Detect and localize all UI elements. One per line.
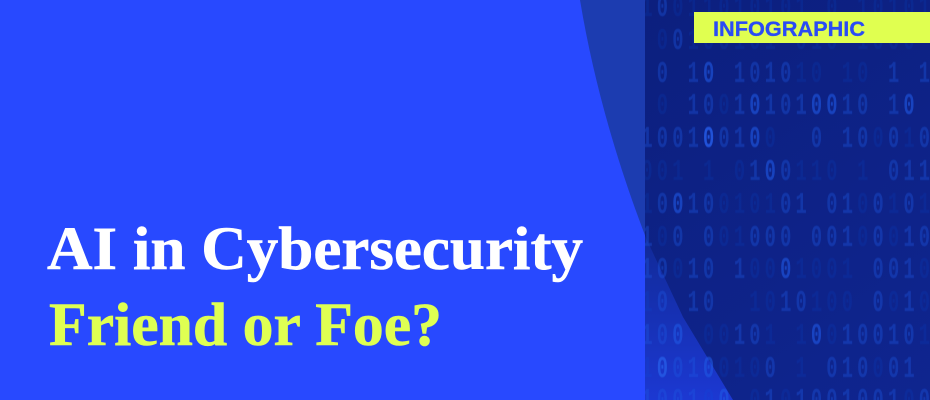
tag: infographic label: INFOGRAPHIC xyxy=(713,18,865,41)
title xyxy=(47,216,583,359)
panel: binary code background: 100 00101 100100101 xyxy=(641,319,930,354)
panel: binary code background: 10010010101 0100101 xyxy=(641,188,930,223)
panel: binary code background: 100100100 0 100010 xyxy=(641,122,930,157)
panel: binary code background: 100 001000 00100010 xyxy=(641,221,930,256)
panel: binary code background: 10010 10001001 0010 xyxy=(641,253,930,288)
panel: binary code background xyxy=(641,0,930,400)
panel: binary code background: 100100100 1 010001 xyxy=(641,352,919,387)
panel: binary code background: 0 100101010010 10 xyxy=(641,89,919,124)
title line 2: Friend or Foe? xyxy=(49,292,442,359)
title line 1: AI in Cybersecurity xyxy=(47,216,583,283)
curved strip xyxy=(580,0,646,238)
panel: binary code background: 001 1 0100110 1 011 xyxy=(641,155,930,190)
panel: binary code background: 0 10 101010 10 1 1 xyxy=(641,57,930,92)
tag: infographic label xyxy=(694,12,930,43)
